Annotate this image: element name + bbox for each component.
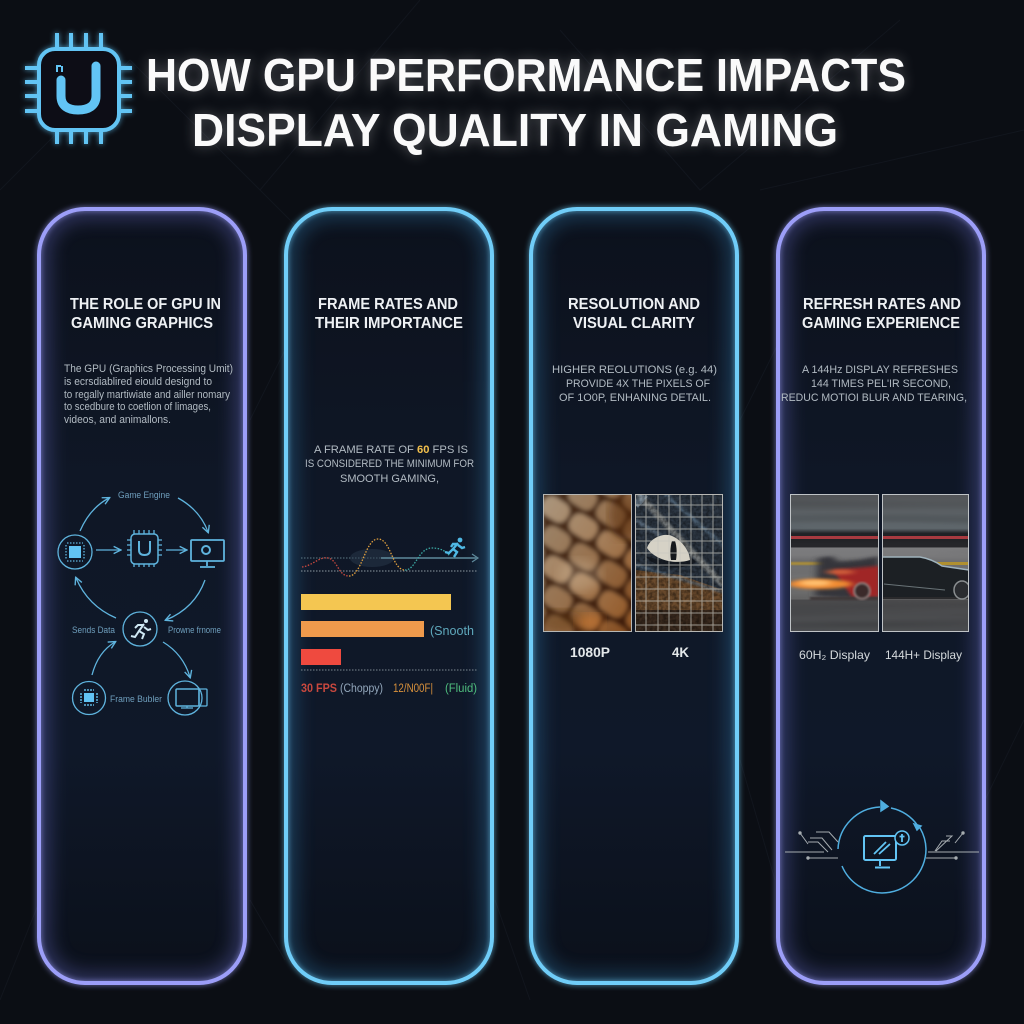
text: role of GPU description: is ecrsdiablired eiould designd to <box>64 376 212 388</box>
text: role of GPU description: to scedbure to coetlion of limages, <box>64 401 211 413</box>
text: refresh description <box>781 364 967 404</box>
labels: fps scale: (Fluid) <box>445 683 477 695</box>
image: 4K dragon eye with pixel grid <box>635 494 723 632</box>
icon: GPU chip <box>127 530 162 567</box>
image: 144Hz sharp car <box>882 494 970 632</box>
panel: role of GPU <box>39 209 245 983</box>
text: refresh description: 144 TIMES PEL'IR SECOND, <box>811 378 951 390</box>
labels: diagram <box>72 490 221 704</box>
title: DISPLAY QUALITY IN GAMING <box>192 104 838 156</box>
labels: diagram: Game Engine <box>118 490 170 500</box>
text: frame rate description: SMOOTH GAMING, <box>340 473 439 485</box>
icon: refresh monitor with circuits <box>785 801 979 893</box>
text: role of GPU description: to regally martiwiate and ailler nomary <box>64 389 230 401</box>
panel: refresh rates <box>778 209 984 983</box>
label: 60Hz: 60H₂ Display <box>799 648 870 662</box>
text: refresh description: REDUC MOTIOI BLUR AND TEARING, <box>781 392 967 404</box>
heading: resolution: RESOLUTION AND <box>568 296 700 313</box>
heading: resolution <box>568 296 700 332</box>
text: role of GPU description <box>64 363 233 426</box>
diagram: GPU render cycle <box>58 498 224 715</box>
heading: refresh rates: REFRESH RATES AND <box>803 296 961 313</box>
icon: frame buffer <box>72 682 106 714</box>
heading: role of GPU: GAMING GRAPHICS <box>71 315 213 332</box>
text: refresh description: A 144Hz DISPLAY REFRESHES <box>802 364 958 376</box>
heading: refresh rates <box>802 296 961 332</box>
text: resolution description: PROVIDE 4X THE PIXELS OF <box>566 378 710 390</box>
text: resolution description: OF 1O0P, ENHANING DETAIL. <box>559 392 711 404</box>
arrows: cycle <box>76 498 208 677</box>
labels: diagram: Frame Bubler <box>110 694 162 704</box>
labels: diagram: Sends Data <box>72 625 115 635</box>
panel: resolution <box>531 209 737 983</box>
text: frame rate description: A FRAME RATE OF 60 FPS IS <box>314 444 468 456</box>
heading: frame rates <box>315 296 463 332</box>
heading: role of GPU: THE ROLE OF GPU IN <box>70 296 221 313</box>
icon: chip circle <box>58 535 92 569</box>
title <box>146 49 906 156</box>
icon: runner <box>123 612 157 646</box>
labels: fps scale: (Choppy) <box>340 683 383 695</box>
text: role of GPU description: The GPU (Graphics Processing Umit) <box>64 363 233 375</box>
heading: role of GPU <box>70 296 221 332</box>
image: 60Hz blurred car <box>788 494 879 632</box>
text: role of GPU description: videos, and animallons. <box>64 414 171 426</box>
image: 1080p blurred scales <box>543 494 632 632</box>
labels: diagram: Prowne frnome <box>168 625 221 635</box>
labels: fps scale: 30 FPS <box>301 683 337 695</box>
heading: resolution: VISUAL CLARITY <box>573 315 695 332</box>
text: resolution description <box>552 364 717 404</box>
icon: GPU chip logo <box>25 33 132 144</box>
heading: refresh rates: GAMING EXPERIENCE <box>802 315 960 332</box>
heading: frame rates: THEIR IMPORTANCE <box>315 315 463 332</box>
icon: displays <box>168 681 207 715</box>
panel: frame rates <box>286 209 492 983</box>
text: resolution description: HIGHER REOLUTIONS (e.g. 44) <box>552 364 717 376</box>
labels: fps scale: 12/N00F| <box>393 683 433 695</box>
text: frame rate description: IS CONSIDERED THE MINIMUM FOR <box>305 458 474 470</box>
chart: frame time wave <box>301 538 478 576</box>
chart: fps bars <box>301 594 477 670</box>
label: 144Hz: 144H+ Display <box>885 648 962 662</box>
label: 4K: 4K <box>672 645 689 660</box>
label: smooth: (Snooth <box>430 623 474 638</box>
labels: fps scale <box>301 683 477 695</box>
label: 1080P: 1080P <box>570 645 610 660</box>
icon: runner <box>445 538 465 557</box>
text: frame rate description <box>305 444 474 485</box>
icon: monitor <box>191 540 224 567</box>
title: HOW GPU PERFORMANCE IMPACTS <box>146 49 906 101</box>
heading: frame rates: FRAME RATES AND <box>318 296 458 313</box>
